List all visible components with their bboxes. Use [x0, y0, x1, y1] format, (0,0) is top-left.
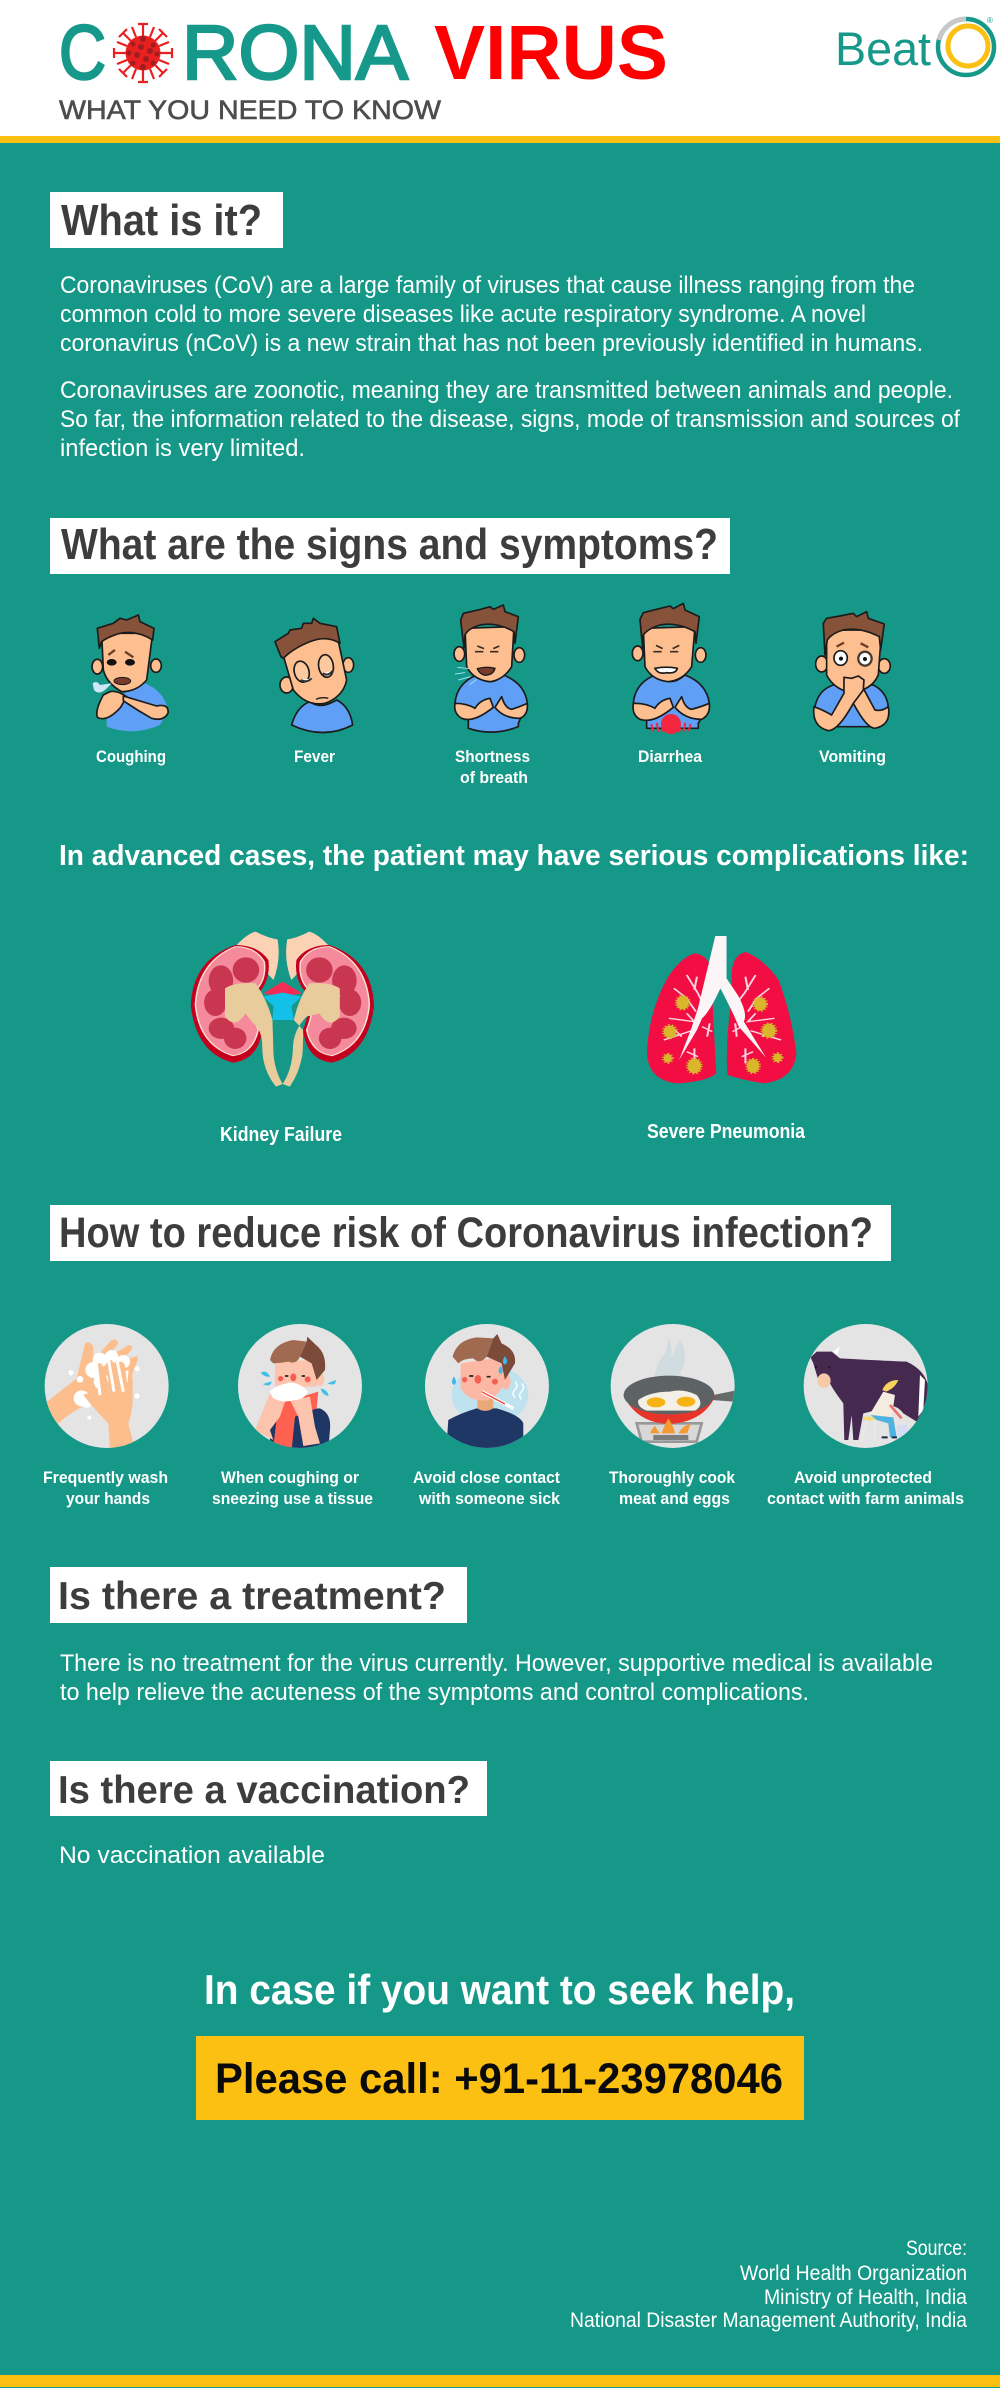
icon: diarrhea person [632, 603, 709, 734]
heading: reduce risk: How to reduce risk of Coronavirus infection? [59, 1209, 873, 1257]
text block: definition: common cold to more severe diseases like acute respiratory syndrome. A novel [60, 301, 866, 328]
title: corona virus: RONA [182, 10, 409, 96]
labels: symptoms: Diarrhea [638, 747, 703, 766]
icon: cooking eggs [611, 1324, 735, 1448]
logo: beat [835, 16, 994, 75]
icon: coughing person [92, 615, 168, 731]
icon: virus in title [114, 24, 172, 82]
logo: beat: ® [987, 16, 993, 25]
labels: prevention: contact with farm animals [767, 1489, 964, 1508]
labels: prevention: meat and eggs [619, 1489, 730, 1508]
logo: beat: Beat [835, 22, 931, 75]
heading: vaccination: Is there a vaccination? [58, 1769, 470, 1812]
text block: definition: infection is very limited. [60, 435, 305, 462]
labels: symptoms [96, 747, 886, 787]
text block: sources: Ministry of Health, India [764, 2286, 967, 2309]
subtitle: WHAT YOU NEED TO KNOW [59, 95, 442, 125]
icon: kidneys [191, 932, 374, 1087]
text block: treatment: There is no treatment for the virus currently. However, supportive medical is available [60, 1650, 933, 1677]
heading: seek help: In case if you want to seek help, [204, 1966, 795, 2013]
labels: prevention [43, 1468, 964, 1508]
panel: vaccination [50, 1761, 487, 1869]
labels: prevention: Thoroughly cook [609, 1468, 735, 1487]
labels: symptoms: Fever [294, 747, 335, 766]
labels: prevention: Frequently wash [43, 1468, 168, 1487]
text block: treatment [60, 1650, 933, 1706]
text block: definition: coronavirus (nCoV) is a new strain that has not been previously identified in humans. [60, 330, 923, 357]
title: corona virus: C [59, 10, 106, 96]
panel: reduce risk [43, 1205, 964, 1508]
title: corona virus [59, 10, 668, 96]
text block: definition: So far, the information related to the disease, signs, mode of transmission and sources of [60, 406, 960, 433]
text block: sources: World Health Organization [740, 2262, 967, 2285]
icon: lungs [647, 936, 796, 1083]
heading: treatment: Is there a treatment? [58, 1575, 446, 1618]
label: kidney failure: Kidney Failure [220, 1124, 342, 1146]
panel: what is it [50, 192, 960, 462]
title: corona virus: VIRUS [434, 10, 668, 96]
text block: definition [60, 272, 960, 462]
text block: treatment: to help relieve the acuteness of the symptoms and control complications. [60, 1679, 809, 1706]
labels: prevention: sneezing use a tissue [212, 1489, 373, 1508]
labels: prevention: with someone sick [418, 1489, 560, 1508]
icon: vomiting person [814, 612, 890, 731]
text block: sources: National Disaster Management Authority, India [570, 2309, 967, 2332]
icon: shortness of breath person [454, 605, 527, 732]
heading: signs and symptoms: What are the signs and symptoms? [61, 520, 718, 569]
labels: symptoms: Vomiting [819, 747, 886, 766]
icon: washing hands [45, 1324, 169, 1450]
callout: seek help [196, 1966, 804, 2120]
icon: fever person [275, 618, 354, 732]
labels: prevention: When coughing or [221, 1468, 359, 1487]
text block: definition: Coronaviruses (CoV) are a large family of viruses that cause illness ranging from the [60, 272, 915, 299]
label: severe pneumonia: Severe Pneumonia [647, 1121, 806, 1143]
text block: sources [570, 2237, 967, 2332]
labels: symptoms: of breath [460, 768, 528, 787]
labels: symptoms: Coughing [96, 747, 166, 766]
text block: vaccination: No vaccination available [59, 1842, 325, 1869]
labels: symptoms: Shortness [455, 747, 530, 766]
panel: signs and symptoms [50, 518, 890, 787]
labels: prevention: your hands [66, 1489, 150, 1508]
phone number box: Please call: +91-11-23978046 [215, 2055, 783, 2103]
labels: prevention: Avoid close contact [413, 1468, 560, 1487]
phone number box [196, 2036, 804, 2120]
heading: what is it: What is it? [61, 196, 262, 245]
header band [0, 0, 1000, 143]
icon: cow and farmer [804, 1324, 928, 1448]
labels: prevention: Avoid unprotected [794, 1468, 932, 1487]
heading: complications: In advanced cases, the patient may have serious complications like: [59, 840, 969, 872]
icon: sick person [425, 1324, 549, 1453]
icon: tissue for cough [238, 1324, 362, 1450]
text block: definition: Coronaviruses are zoonotic, meaning they are transmitted between animals and people. [60, 377, 953, 404]
panel: treatment [50, 1567, 933, 1706]
text block: sources: Source: [906, 2237, 967, 2260]
